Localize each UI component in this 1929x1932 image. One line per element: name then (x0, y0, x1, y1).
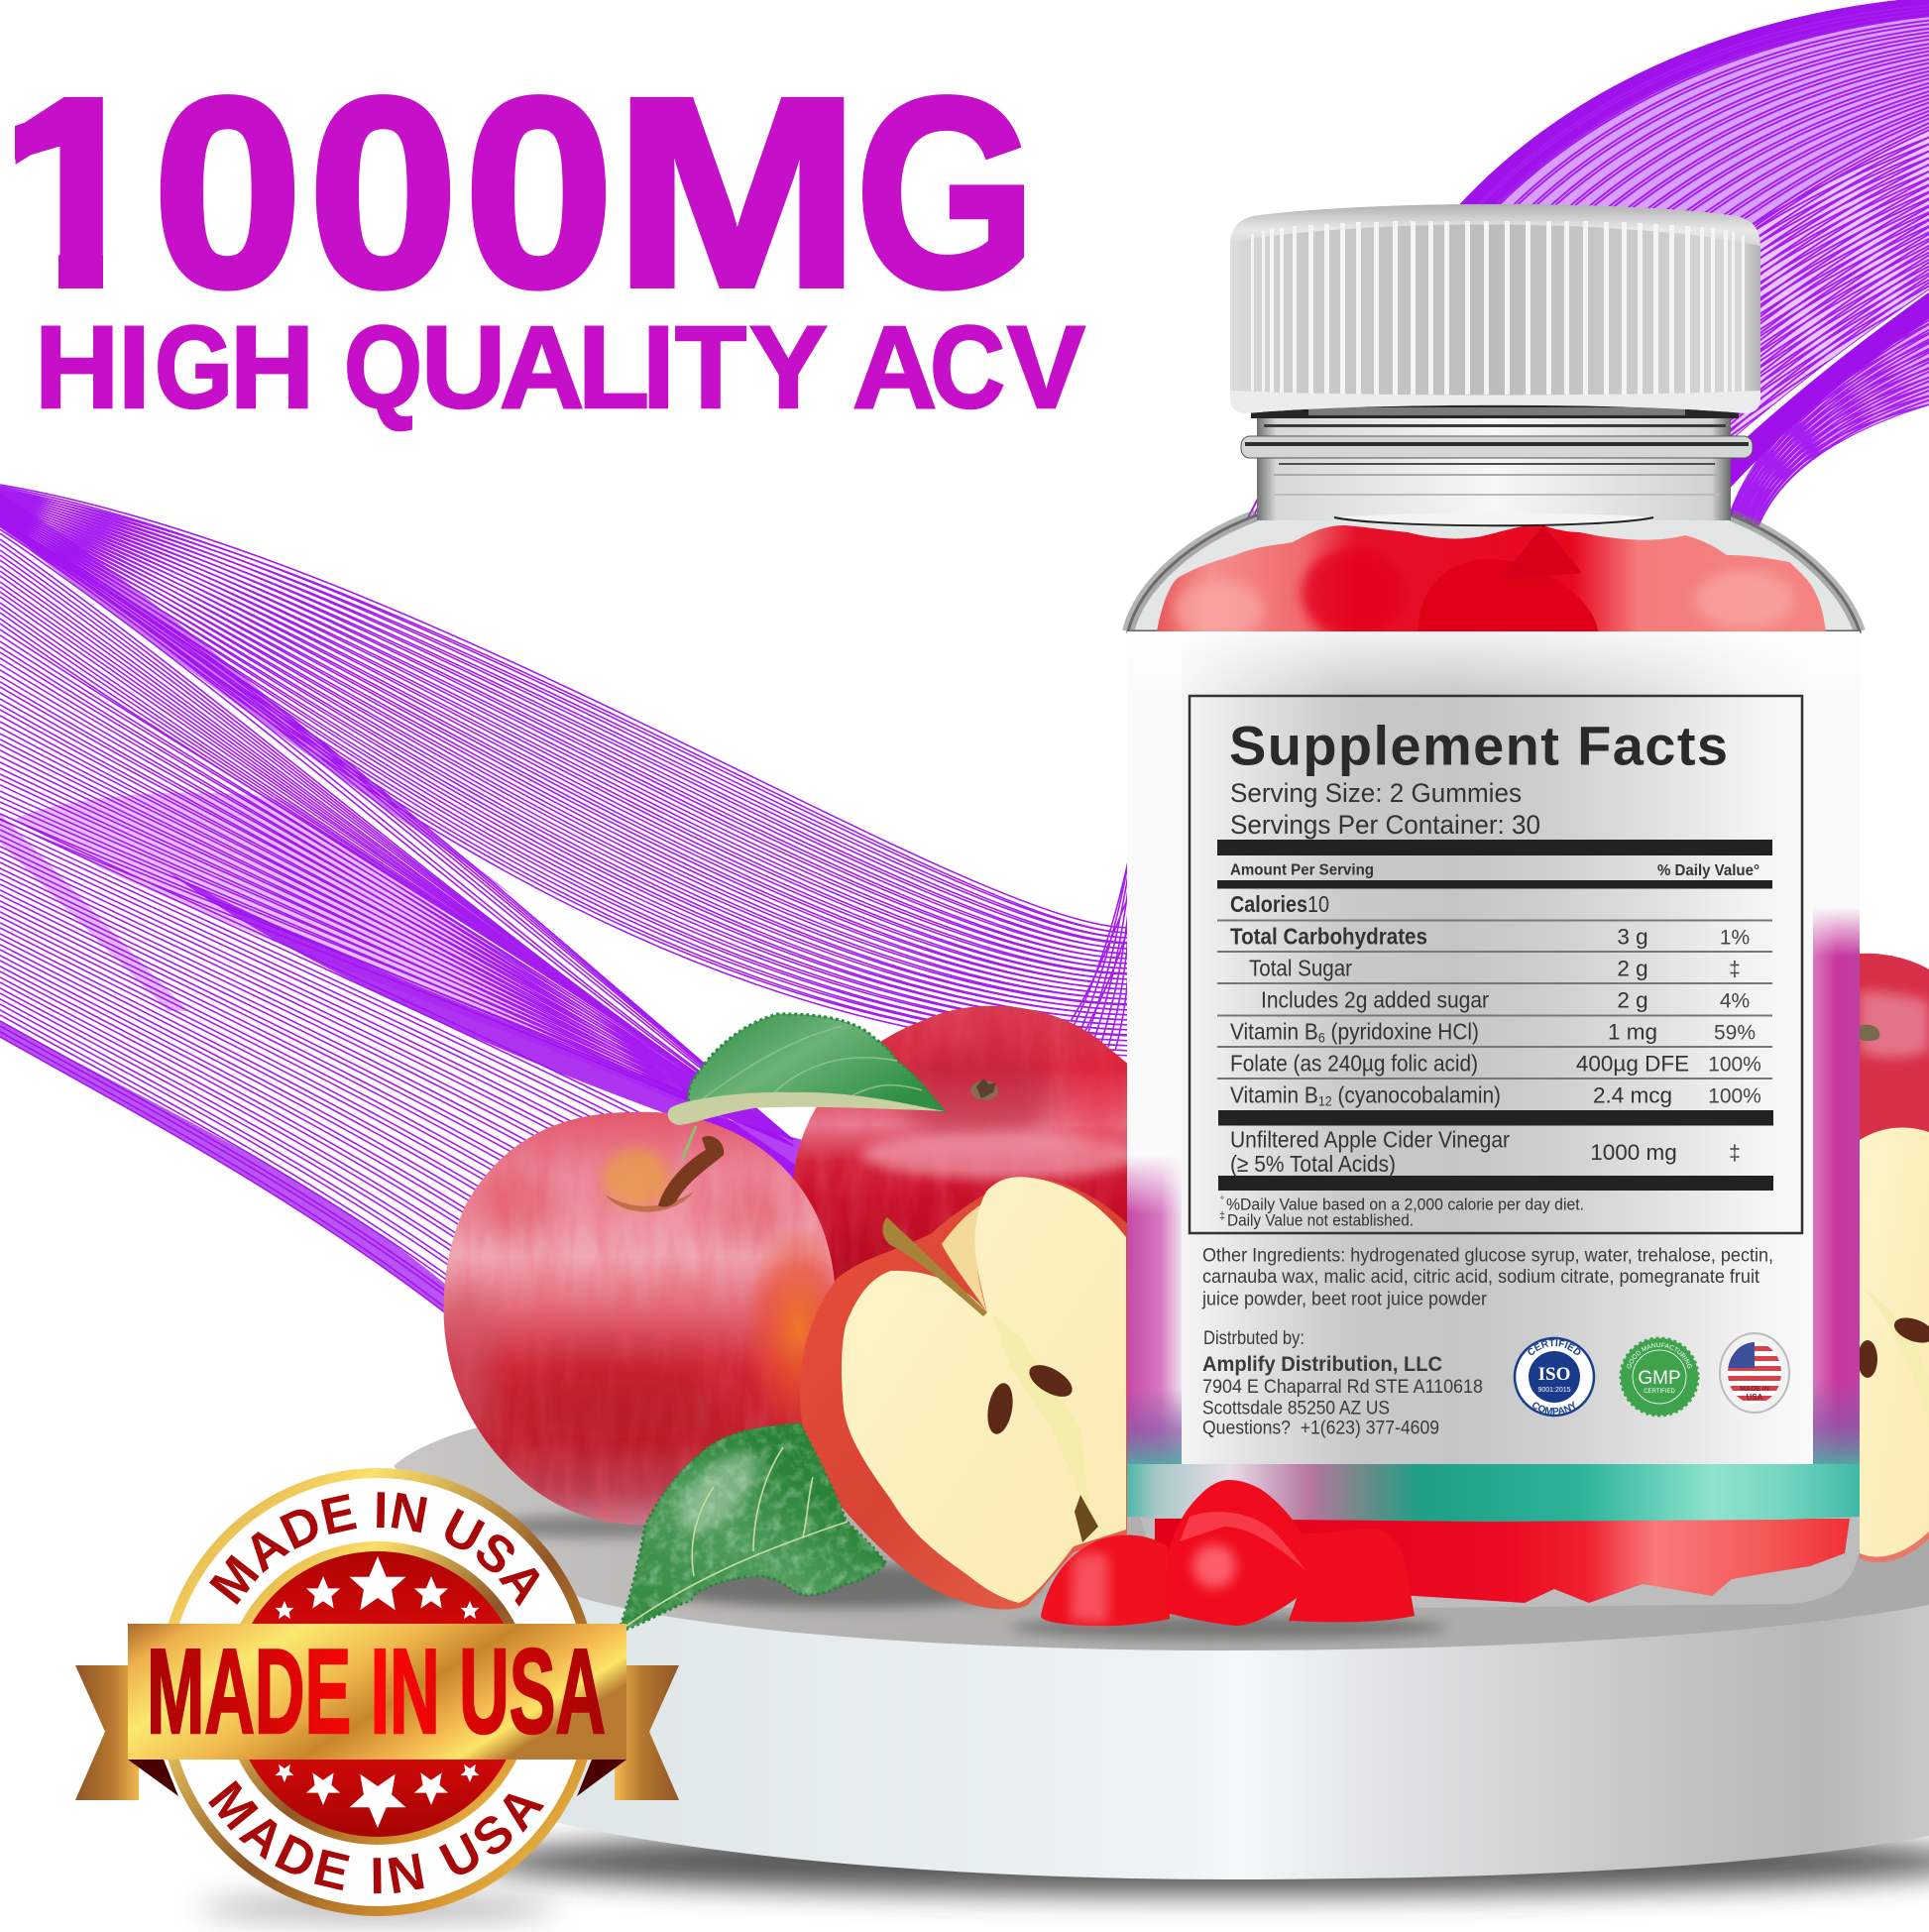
nutrient rows: Total Sugar (1249, 956, 1352, 981)
badge: USA flag (1720, 1333, 1789, 1413)
apple: cut half (800, 1177, 1150, 1609)
bottle glass shoulder (1128, 515, 1860, 639)
nutrient rows: Calories10 (1230, 891, 1329, 917)
headline: 1000MG: 0 (308, 42, 458, 343)
table bars and rules (1217, 840, 1773, 1191)
badge arc text: MADE IN USA (209, 1492, 539, 1607)
daily value column: 1% (1720, 926, 1750, 950)
flag of the digit 1 (15, 97, 102, 160)
amount column: 3 g (1617, 924, 1648, 950)
subheadline: Q (344, 302, 422, 433)
badge: ISO: COMPANY (1532, 1401, 1576, 1415)
daily value column: 100% (1708, 1084, 1761, 1108)
other ingredients: Other Ingredients: hydrogenated glucose syrup, water, trehalose, pectin, (1202, 1246, 1773, 1267)
distributor: Questions? +1(623) 377-4609 (1202, 1419, 1439, 1439)
nutrient rows: Unfiltered Apple Cider Vinegar (1230, 1126, 1510, 1152)
amount column: 2 g (1617, 987, 1648, 1013)
badge ribbon banner (128, 1624, 626, 1760)
apple: large whole (436, 1112, 852, 1525)
table column headers (1230, 862, 1759, 879)
amount column: 400µg DFE (1576, 1051, 1689, 1077)
amount column: 2.4 mcg (1593, 1082, 1672, 1108)
badge stars (276, 1556, 480, 1828)
badge: USA flag: USA (1747, 1393, 1763, 1402)
platform pedestal (394, 1420, 1929, 1879)
ribbon tails (75, 1665, 679, 1800)
purple line waves, left (0, 485, 1130, 1313)
leaf: bottom (619, 1423, 886, 1632)
badge: ISO: 9001:2015 (1537, 1387, 1571, 1394)
contact shadows on platform (486, 1515, 1447, 1640)
nutrient rows (1230, 891, 1510, 1177)
badge arc text (208, 1492, 545, 1893)
amount column: 1000 mg (1590, 1140, 1677, 1165)
nutrient rows: (cyanocobalamin) (1332, 1082, 1501, 1108)
nutrient rows: Vitamin B (1230, 1082, 1329, 1108)
nutrient rows: (≥ 5% Total Acids) (1230, 1151, 1396, 1177)
bottle neck (1241, 404, 1753, 525)
distributor: Scottsdale 85250 AZ US (1202, 1399, 1390, 1420)
headline: 1000MG: 0 (464, 42, 614, 343)
subheadline: A (500, 302, 584, 433)
daily value column (1708, 926, 1761, 1165)
subheadline: A (852, 302, 937, 433)
bottle (1127, 204, 1860, 1608)
badge: ISO: CERTIFIED (1528, 1339, 1580, 1355)
nutrient rows: (pyridoxine HCl) (1325, 1019, 1479, 1045)
serving info: Servings Per Container: 30 (1230, 810, 1540, 840)
daily value column: ‡ (1729, 958, 1741, 981)
badge shadow (199, 1894, 556, 1922)
distributor: 7904 E Chaparral Rd STE A110618 (1202, 1377, 1483, 1398)
badge: GMP: GOOD MANUFACTURING (1627, 1342, 1692, 1368)
leaf: top (668, 1014, 945, 1125)
other ingredients: juice powder, beet root juice powder (1201, 1290, 1488, 1310)
distributor (1202, 1328, 1483, 1439)
title (0, 42, 1085, 433)
daily value column: 100% (1708, 1053, 1761, 1077)
other ingredients (1201, 1246, 1773, 1310)
headline: 1000MG: G (855, 42, 1036, 343)
nutrient rows: 6 (1318, 1029, 1325, 1045)
footnotes: Daily Value not established. (1227, 1211, 1414, 1229)
subheadline: Y (749, 302, 857, 433)
serving info (1230, 778, 1540, 840)
badge arc text: MADE IN USA (208, 1780, 545, 1893)
nutrient rows: Includes 2g added sugar (1261, 987, 1489, 1013)
distributor: Amplify Distribution, LLC (1202, 1353, 1442, 1376)
badge: GMP: CERTIFIED (1644, 1389, 1675, 1395)
nutrient rows: 12 (1318, 1092, 1332, 1108)
purple line waves, upper right (1244, 0, 1929, 534)
badge: GMP (1620, 1336, 1699, 1418)
footnotes: ° (1220, 1195, 1224, 1206)
table column headers: % Daily Value° (1657, 862, 1759, 879)
subheadline: V (1007, 302, 1085, 433)
other ingredients: carnauba wax, malic acid, citric acid, sodium citrate, pomegranate fruit (1202, 1267, 1760, 1288)
amount column: 1 mg (1608, 1019, 1657, 1045)
footnotes: %Daily Value based on a 2,000 calorie per day diet. (1226, 1195, 1584, 1213)
badge medal (158, 1468, 598, 1916)
amount column: 2 g (1617, 956, 1648, 981)
subheadline: U (421, 302, 506, 433)
table column headers: Amount Per Serving (1230, 862, 1374, 878)
apple: right of bottle (1858, 954, 1929, 1562)
subheadline: I (642, 302, 675, 433)
subheadline: H (230, 302, 347, 433)
subheadline: I (118, 302, 151, 433)
supplement facts panel (1190, 696, 1802, 1233)
apple: back (793, 1005, 1127, 1283)
badge: USA flag: MADE IN (1740, 1386, 1769, 1393)
amount column (1576, 924, 1689, 1165)
masks for the foot of the digit 1 (0, 253, 149, 294)
daily value column: ‡ (1729, 1142, 1741, 1165)
daily value column: 59% (1714, 1021, 1756, 1045)
badge ribbon banner: MADE IN USA (147, 1624, 606, 1759)
distributor: Distrbuted by: (1203, 1328, 1305, 1349)
wave dark bands, left (0, 494, 813, 1313)
subheadline: T (675, 302, 746, 433)
bottle base with gummies inside (1140, 1517, 1860, 1608)
subheadline: L (578, 302, 649, 433)
subheadline: G (155, 302, 233, 433)
headline: 1000MG: 1 (0, 42, 150, 343)
platform shadow (476, 1828, 1929, 1895)
headline: 1000MG: M (614, 42, 860, 343)
badge: GMP: GMP (1638, 1368, 1681, 1389)
bottle cap (1230, 204, 1760, 413)
badge: ISO (1513, 1336, 1596, 1418)
badge: made in USA (75, 1468, 679, 1932)
footnotes: ‡ (1219, 1210, 1225, 1222)
label background (1127, 631, 1860, 1522)
nutrient rows: Folate (as 240µg folic acid) (1230, 1051, 1478, 1077)
nutrient rows: Vitamin B (1230, 1019, 1329, 1045)
headline: 1000MG: 0 (153, 42, 302, 343)
badge: ISO: ISO (1538, 1364, 1570, 1385)
daily value column: 4% (1720, 989, 1750, 1013)
subheadline: C (930, 302, 1005, 433)
serving info: Serving Size: 2 Gummies (1230, 778, 1522, 808)
gummies in front (1041, 1480, 1415, 1626)
footnotes (1219, 1195, 1584, 1229)
nutrient rows: Total Carbohydrates (1230, 924, 1427, 950)
heading: Supplement Facts: Supplement Facts (1229, 714, 1728, 777)
subheadline: H (35, 302, 119, 433)
